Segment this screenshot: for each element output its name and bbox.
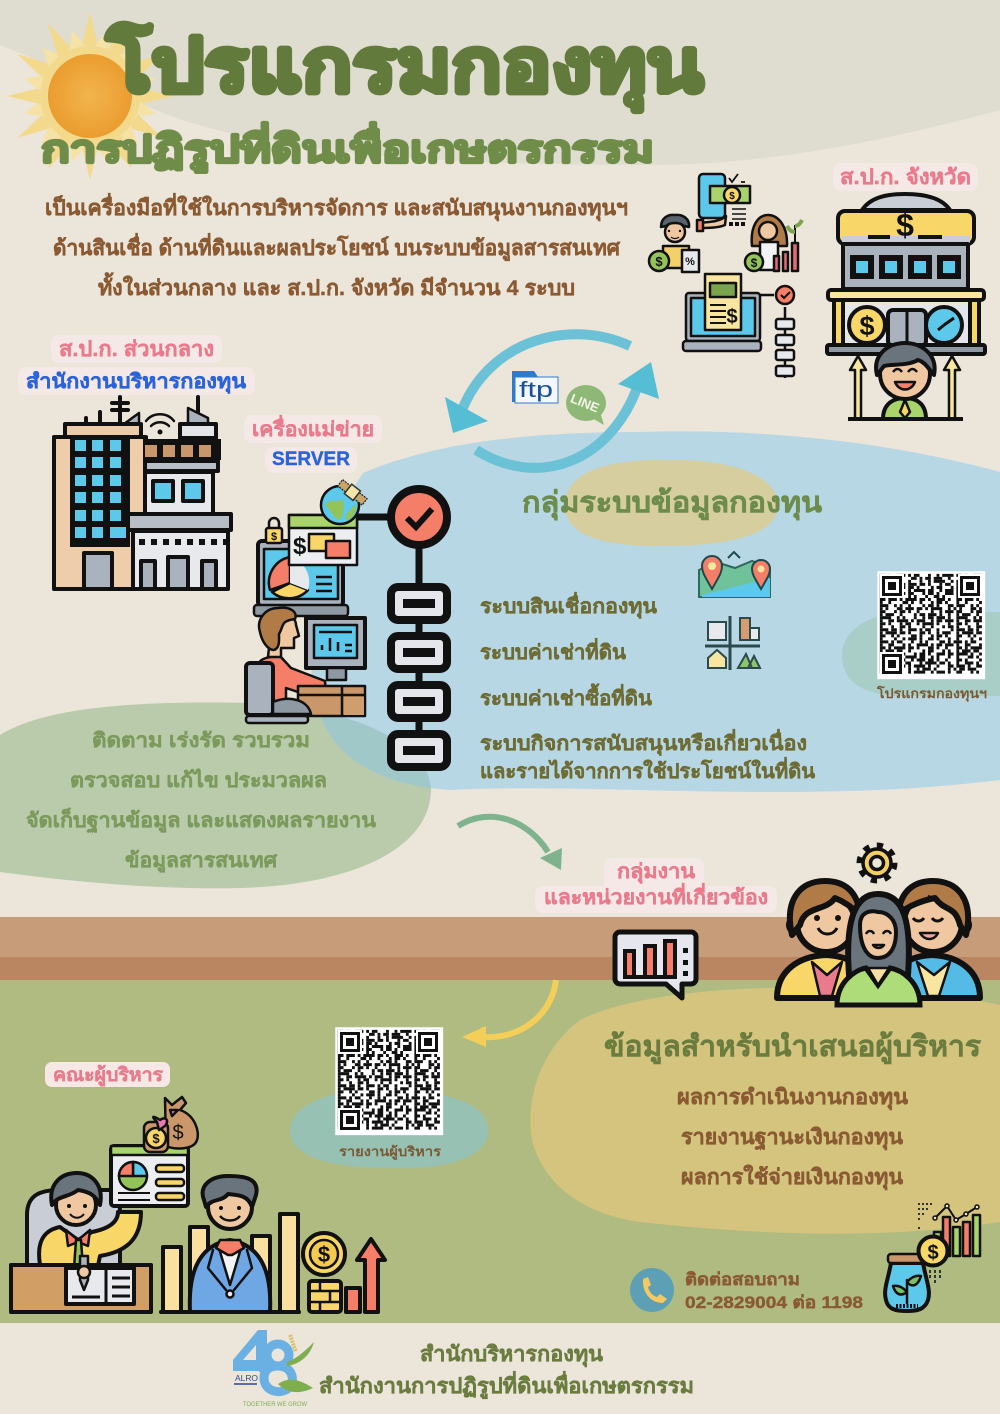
icon: LINE bubble <box>566 385 606 425</box>
footer text <box>319 1343 694 1400</box>
icon: mobile money cycle cluster: % <box>685 256 695 268</box>
yellow blob: executive data <box>530 987 1000 1234</box>
blue blob: data system group <box>311 431 1000 792</box>
heading: data system group: กลุ่มระบบข้อมูลกองทุน <box>522 487 822 520</box>
caption: program QR: โปรแกรมกองทุนฯ <box>876 685 987 702</box>
contact text <box>685 1270 863 1312</box>
QR code: executive report <box>335 1027 443 1135</box>
arrow: data exchange cycle bottom <box>476 362 659 468</box>
label: server Thai: เครื่องแม่ข่าย <box>252 414 374 441</box>
label: provincial ALRO: ส.ป.ก. จังหวัด <box>840 166 971 189</box>
list: executive reports: รายงานฐานะเงินกองทุน <box>681 1126 904 1151</box>
icon: chart speech bubble <box>615 932 696 998</box>
monitoring task text: ติดตาม เร่งรัด รวบรวม <box>92 730 310 752</box>
intro text: เป็นเครื่องมือที่ใช้ในการบริหารจัดการ และสนับสนุนงานกองทุนฯ <box>45 192 628 222</box>
footer text: สำนักบริหารกองทุน <box>420 1343 604 1368</box>
arrow: yellow to executive QR <box>462 980 556 1047</box>
ground: soil strips <box>0 917 1000 980</box>
icon: phone circle <box>630 1268 674 1312</box>
icon: land map with pins <box>699 552 770 597</box>
monitoring task text <box>26 730 376 874</box>
label: work units <box>535 858 777 913</box>
label: SERVER: SERVER <box>272 449 350 470</box>
label: executives: คณะผู้บริหาร <box>53 1064 164 1087</box>
intro text: ด้านสินเชื่อ ด้านที่ดินและผลประโยชน์ บนระบบข้อมูลสารสนเทศ <box>53 232 621 262</box>
contact text: ติดต่อสอบถาม <box>685 1270 800 1289</box>
label: work units: และหน่วยงานที่เกี่ยวข้อง <box>544 882 768 909</box>
arrow: green to work units <box>458 817 562 870</box>
icon: sun <box>6 12 174 180</box>
icon: seed jar and chart: $ <box>927 1242 939 1264</box>
list: fund systems <box>480 591 815 783</box>
heading: data for executives: ข้อมูลสำหรับนำเสนอผู้บริหาร <box>604 1031 981 1064</box>
caption: executive QR: รายงานผู้บริหาร <box>339 1144 441 1160</box>
flowchart: large checklist chain <box>350 489 447 770</box>
list: fund systems: ระบบค่าเช่าซื้อที่ดิน <box>480 683 652 710</box>
list: executive reports: ผลการดำเนินงานกองทุน <box>677 1086 909 1111</box>
blob overlap tint <box>321 717 431 788</box>
icon: seed jar and chart <box>885 1204 980 1311</box>
icon: ftp folder <box>512 371 558 403</box>
icon: team of three <box>777 881 980 1005</box>
icon: executive at desk <box>11 1097 198 1312</box>
list: fund systems: ระบบค่าเช่าที่ดิน <box>480 637 626 664</box>
icon: LINE bubble: LINE <box>568 391 602 416</box>
list: executive reports: ผลการใช้จ่ายเงินกองทุน <box>681 1164 904 1191</box>
icon: provincial ALRO building: $ <box>859 311 875 341</box>
green blob: monitoring tasks <box>0 702 431 888</box>
arrow: data exchange cycle top <box>445 334 630 433</box>
icon: town plan <box>705 616 760 670</box>
icon: provincial ALRO building <box>827 194 985 419</box>
label: server Thai <box>244 414 382 443</box>
icon: server operator with computers: $ <box>271 531 277 543</box>
logo: ALRO 48 years <box>233 1330 314 1408</box>
icon: ftp folder: ftp <box>519 377 553 402</box>
logo: ALRO 48 years: TOGETHER WE GROW <box>243 1402 307 1408</box>
icon: mobile money cycle cluster: $ <box>751 256 758 270</box>
icon: executive at desk: $ <box>152 1131 160 1146</box>
top curved header band <box>0 0 1000 165</box>
icon: mobile money cycle cluster: $ <box>726 306 738 328</box>
icon: mobile money cycle cluster <box>649 174 802 378</box>
list: fund systems: และรายได้จากการใช้ประโยชน์ในที่ดิน <box>480 756 815 783</box>
icon: executive at desk: $ <box>172 1122 184 1144</box>
teal blob behind executive QR <box>290 1090 488 1168</box>
monitoring task text: จัดเก็บฐานข้อมูล และแสดงผลรายงาน <box>26 807 376 834</box>
footer band <box>0 1323 1000 1414</box>
icon: provincial ALRO building: $ <box>896 207 914 243</box>
icon: central office building <box>54 397 231 589</box>
icon: mobile money cycle cluster: $ <box>729 191 735 202</box>
khaki ellipse behind group heading <box>565 460 778 546</box>
label: fund office: สำนักงานบริหารกองทุน <box>26 371 246 394</box>
logo: ALRO 48 years: ALRO <box>235 1374 258 1383</box>
contact text: 02-2829004 ต่อ 1198 <box>685 1293 863 1312</box>
icon: mobile money cycle cluster: $ <box>655 254 663 269</box>
title: โปรแกรมกองทุน <box>106 22 703 112</box>
icon: executive with bars <box>161 1176 299 1312</box>
QR code: fund program <box>877 571 985 679</box>
icon: gear <box>860 846 894 880</box>
label: fund office <box>18 367 255 395</box>
icon: coin, bricks and growth arrow <box>303 1233 385 1312</box>
list: executive reports <box>677 1086 909 1191</box>
list: fund systems: ระบบกิจการสนับสนุนหรือเกี่ยวเนื่อง <box>480 728 807 756</box>
footer text: สำนักงานการปฏิรูปที่ดินเพื่อเกษตรกรรม <box>319 1370 694 1400</box>
icon: server operator with computers: $ <box>293 533 307 560</box>
label: SERVER <box>265 447 357 473</box>
monitoring task text: ตรวจสอบ แก้ไข ประมวลผล <box>70 768 327 792</box>
list: fund systems: ระบบสินเชื่อกองทุน <box>480 591 657 619</box>
icon: server operator with computers <box>246 478 368 723</box>
ground: green field <box>0 980 1000 1323</box>
teal blob behind program QR <box>842 612 1000 696</box>
label: work units: กลุ่มงาน <box>617 861 695 884</box>
subtitle: การปฏิรูปที่ดินเพื่อเกษตรกรรม <box>41 122 654 173</box>
label: central ALRO: ส.ป.ก. ส่วนกลาง <box>59 338 214 361</box>
intro text: ทั้งในส่วนกลาง และ ส.ป.ก. จังหวัด มีจำนวน 4 ระบบ <box>98 272 575 300</box>
icon: coin, bricks and growth arrow: $ <box>318 1242 330 1267</box>
intro text <box>45 192 628 300</box>
monitoring task text: ข้อมูลสารสนเทศ <box>125 849 278 874</box>
